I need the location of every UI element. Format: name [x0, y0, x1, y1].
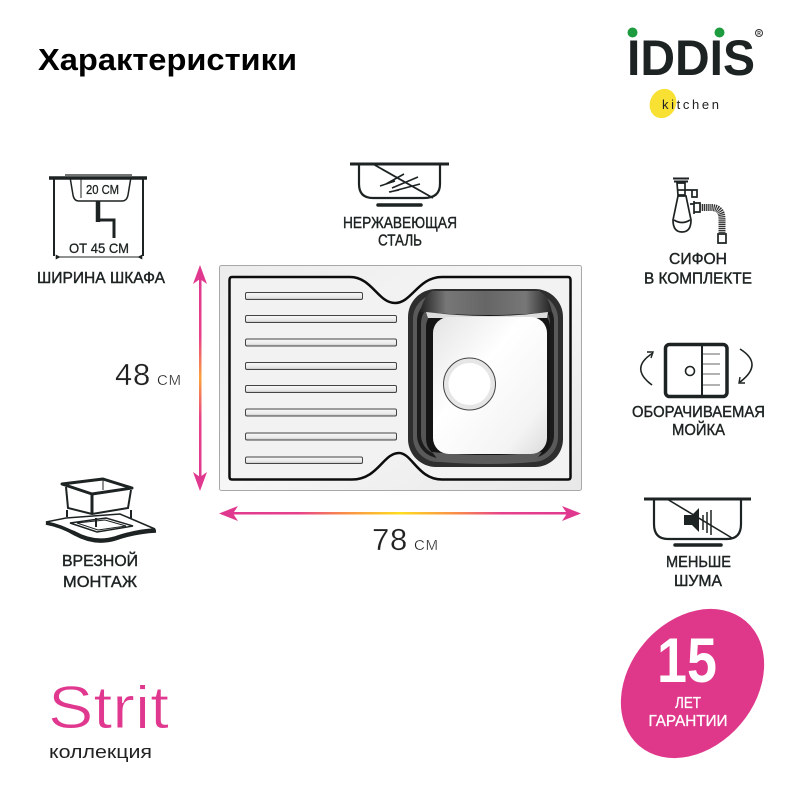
label: less noise: ШУМА [674, 573, 723, 590]
label: ширина шкафа: ШИРИНА ШКАФА [37, 270, 166, 287]
collection label: коллекция [49, 741, 152, 762]
sink photo [220, 266, 582, 490]
label: less noise [666, 554, 731, 590]
arrow: width [219, 506, 581, 521]
label: flush mount [62, 551, 138, 591]
icon: stainless steel [350, 164, 449, 205]
bowl wall [408, 289, 563, 467]
label: stainless steel [343, 215, 457, 250]
icon: less noise [644, 499, 751, 545]
label: stainless steel: СТАЛЬ [378, 232, 422, 250]
icon: cabinet width [49, 175, 147, 259]
logo: IDDIS kitchen: R [757, 31, 761, 37]
label: reversible sink: МОЙКА [672, 421, 726, 439]
drain [444, 358, 496, 410]
dimension: 48 cm: 48 СМ [115, 357, 181, 392]
label: siphon [644, 251, 752, 288]
warranty badge: ЛЕТ [675, 695, 701, 712]
warranty badge: 15 [657, 626, 717, 696]
label: flush mount: ВРЕЗНОЙ [62, 551, 138, 570]
logo: IDDIS kitchen: IDDIS [627, 30, 755, 86]
warranty badge [591, 580, 794, 787]
bowl bottom wall highlight [432, 452, 542, 464]
sink plate [220, 266, 582, 490]
logo: IDDIS kitchen [627, 28, 762, 123]
icon: reversible sink [641, 344, 752, 396]
text: 20 см: 20 СМ [86, 182, 119, 197]
bowl top wall highlight [420, 291, 552, 315]
label: reversible sink: ОБОРАЧИВАЕМАЯ [632, 404, 765, 421]
label: siphon: В КОМПЛЕКТЕ [644, 270, 752, 288]
text: от 45 см: ОТ 45 СМ [69, 240, 129, 256]
label: flush mount: МОНТАЖ [63, 574, 137, 591]
warranty badge: ГАРАНТИИ [648, 713, 728, 730]
logo: IDDIS kitchen: kitchen [662, 97, 719, 112]
rim outline [230, 277, 570, 480]
drainer slots [246, 292, 396, 464]
arrow: height [193, 265, 207, 491]
label: stainless steel: НЕРЖАВЕЮЩАЯ [343, 215, 457, 232]
label: siphon: СИФОН [669, 251, 727, 268]
bowl floor [433, 317, 547, 454]
icon: siphon [673, 178, 726, 243]
label: less noise: МЕНЬШЕ [666, 554, 731, 571]
label: reversible sink [632, 404, 765, 439]
collection name: Strit [48, 674, 169, 741]
dimension: 78 cm: 78 СМ [372, 522, 438, 557]
title: Характеристики [38, 42, 297, 77]
icon: flush mount [46, 479, 156, 541]
